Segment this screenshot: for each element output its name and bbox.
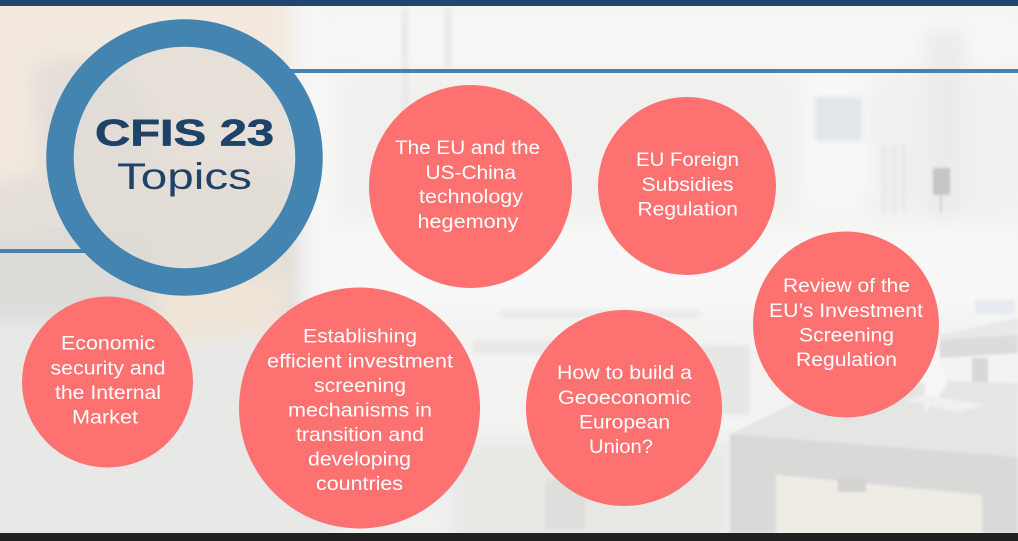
- speaker: [730, 168, 1018, 533]
- topic: How to build a Geoeconomic European Union?: European: [579, 412, 670, 434]
- topic: Economic security and the Internal Market: security and: [50, 358, 166, 380]
- topic: Economic security and the Internal Market: Market: [72, 408, 139, 428]
- topic: Establishing efficient investment screening mechanisms: mechanisms in: [288, 400, 432, 422]
- topic: EU Foreign Subsidies Regulation: Regulation: [638, 200, 738, 220]
- topic: Economic security and the Internal Market: the Internal: [55, 383, 161, 404]
- topic: The EU and the US-China technology hegemony: hegemony: [418, 212, 519, 233]
- title ring with heading: [60, 33, 309, 282]
- topic: Review of the EU's Investment Screening Regulation: Regulation: [796, 350, 897, 371]
- topic: EU Foreign Subsidies Regulation: Subsidies: [642, 175, 734, 196]
- topic: Review of the EU's Investment Screening Regulation: [753, 232, 939, 418]
- topic: Review of the EU's Investment Screening Regulation: EU’s Investment: [769, 301, 924, 322]
- topic: How to build a Geoeconomic European Union?: Union?: [589, 437, 653, 458]
- heading: Topics: Topics: [117, 156, 252, 197]
- topic: Establishing efficient investment screening mechanisms: developing: [308, 450, 411, 470]
- topic: Establishing efficient investment screening mechanisms: efficient investment: [267, 352, 454, 372]
- topic: The EU and the US-China technology hegemony: [369, 85, 572, 288]
- topic: How to build a Geoeconomic European Union?: Geoeconomic: [558, 388, 691, 409]
- heading: CFIS 23: CFIS 23: [95, 112, 274, 154]
- topic: Economic security and the Internal Market: [22, 296, 193, 468]
- topic: Establishing efficient investment screening mechanisms: screening: [314, 376, 406, 397]
- right header line: [288, 69, 1018, 73]
- bottom dark bar: [0, 533, 1018, 541]
- topic: How to build a Geoeconomic European Union?: How to build a: [557, 363, 692, 384]
- topic: Establishing efficient investment screening mechanisms: countries: [316, 474, 403, 495]
- topic: EU Foreign Subsidies Regulation: [598, 97, 776, 275]
- topic: Review of the EU's Investment Screening Regulation: Screening: [799, 326, 894, 346]
- topic: The EU and the US-China technology hegemony: US-China: [426, 163, 516, 184]
- topic: How to build a Geoeconomic European Union?: [526, 310, 722, 506]
- topic: Establishing efficient investment screening mechanisms: transition and: [296, 425, 424, 446]
- topic: The EU and the US-China technology hegemony: technology: [419, 187, 524, 208]
- topic: EU Foreign Subsidies Regulation: EU Foreign: [636, 150, 739, 171]
- topic: Economic security and the Internal Market: Economic: [61, 334, 155, 354]
- topic: Review of the EU's Investment Screening Regulation: Review of the: [783, 276, 910, 297]
- left header line: [0, 249, 90, 253]
- ring: [60, 33, 309, 282]
- top navy bar: [0, 0, 1018, 6]
- topic: Establishing efficient investment screening mechanisms: Establishing: [303, 326, 417, 348]
- topic: The EU and the US-China technology hegemony: The EU and the: [395, 138, 540, 159]
- topic: Establishing efficient investment screening mechanisms: [239, 288, 480, 528]
